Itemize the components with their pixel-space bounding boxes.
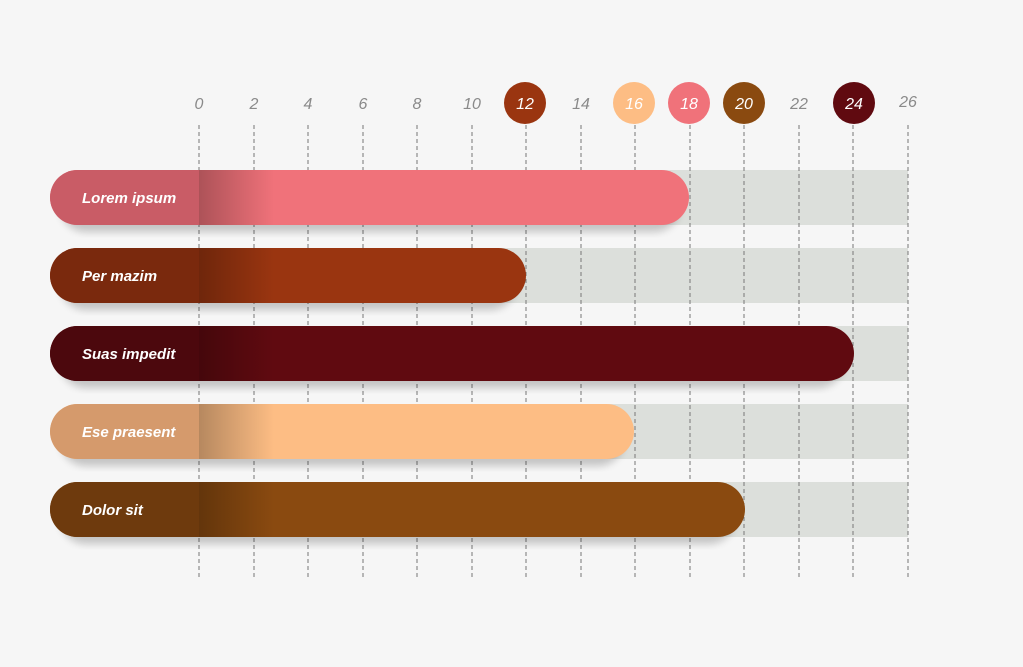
track backgrounds: [199, 170, 908, 537]
axis labels: 14: [572, 96, 590, 113]
bar: Suas impedit 24: [50, 326, 854, 388]
axis labels: 8: [413, 96, 422, 113]
axis labels: 6: [359, 96, 368, 113]
axis labels: 22: [789, 96, 808, 113]
bar: Per mazim 12: Per mazim: [82, 268, 157, 285]
value markers: 20: [734, 96, 753, 113]
bar: Dolor sit 20: Dolor sit: [82, 502, 144, 519]
value markers: 16: [625, 96, 643, 113]
bar: Ese praesent 16: Ese praesent: [82, 424, 176, 441]
axis labels: 0: [195, 96, 204, 113]
axis labels: [195, 94, 917, 113]
bar: Suas impedit 24: Suas impedit: [82, 346, 176, 363]
axis labels: 10: [463, 96, 481, 113]
value markers: [504, 82, 875, 124]
axis labels: 4: [304, 96, 313, 113]
value markers: 24: [844, 96, 863, 113]
value markers: 18: [680, 96, 698, 113]
bar: Lorem ipsum 18: [50, 170, 689, 232]
grid lines: [199, 125, 908, 578]
bar: Ese praesent 16: [50, 404, 634, 466]
bar: Dolor sit 20: [50, 482, 745, 544]
axis labels: 2: [249, 96, 259, 113]
axis labels: 26: [898, 94, 917, 111]
bar: Per mazim 12: [50, 248, 526, 310]
value markers: 12: [516, 96, 534, 113]
bar: Lorem ipsum 18: Lorem ipsum: [82, 190, 176, 207]
